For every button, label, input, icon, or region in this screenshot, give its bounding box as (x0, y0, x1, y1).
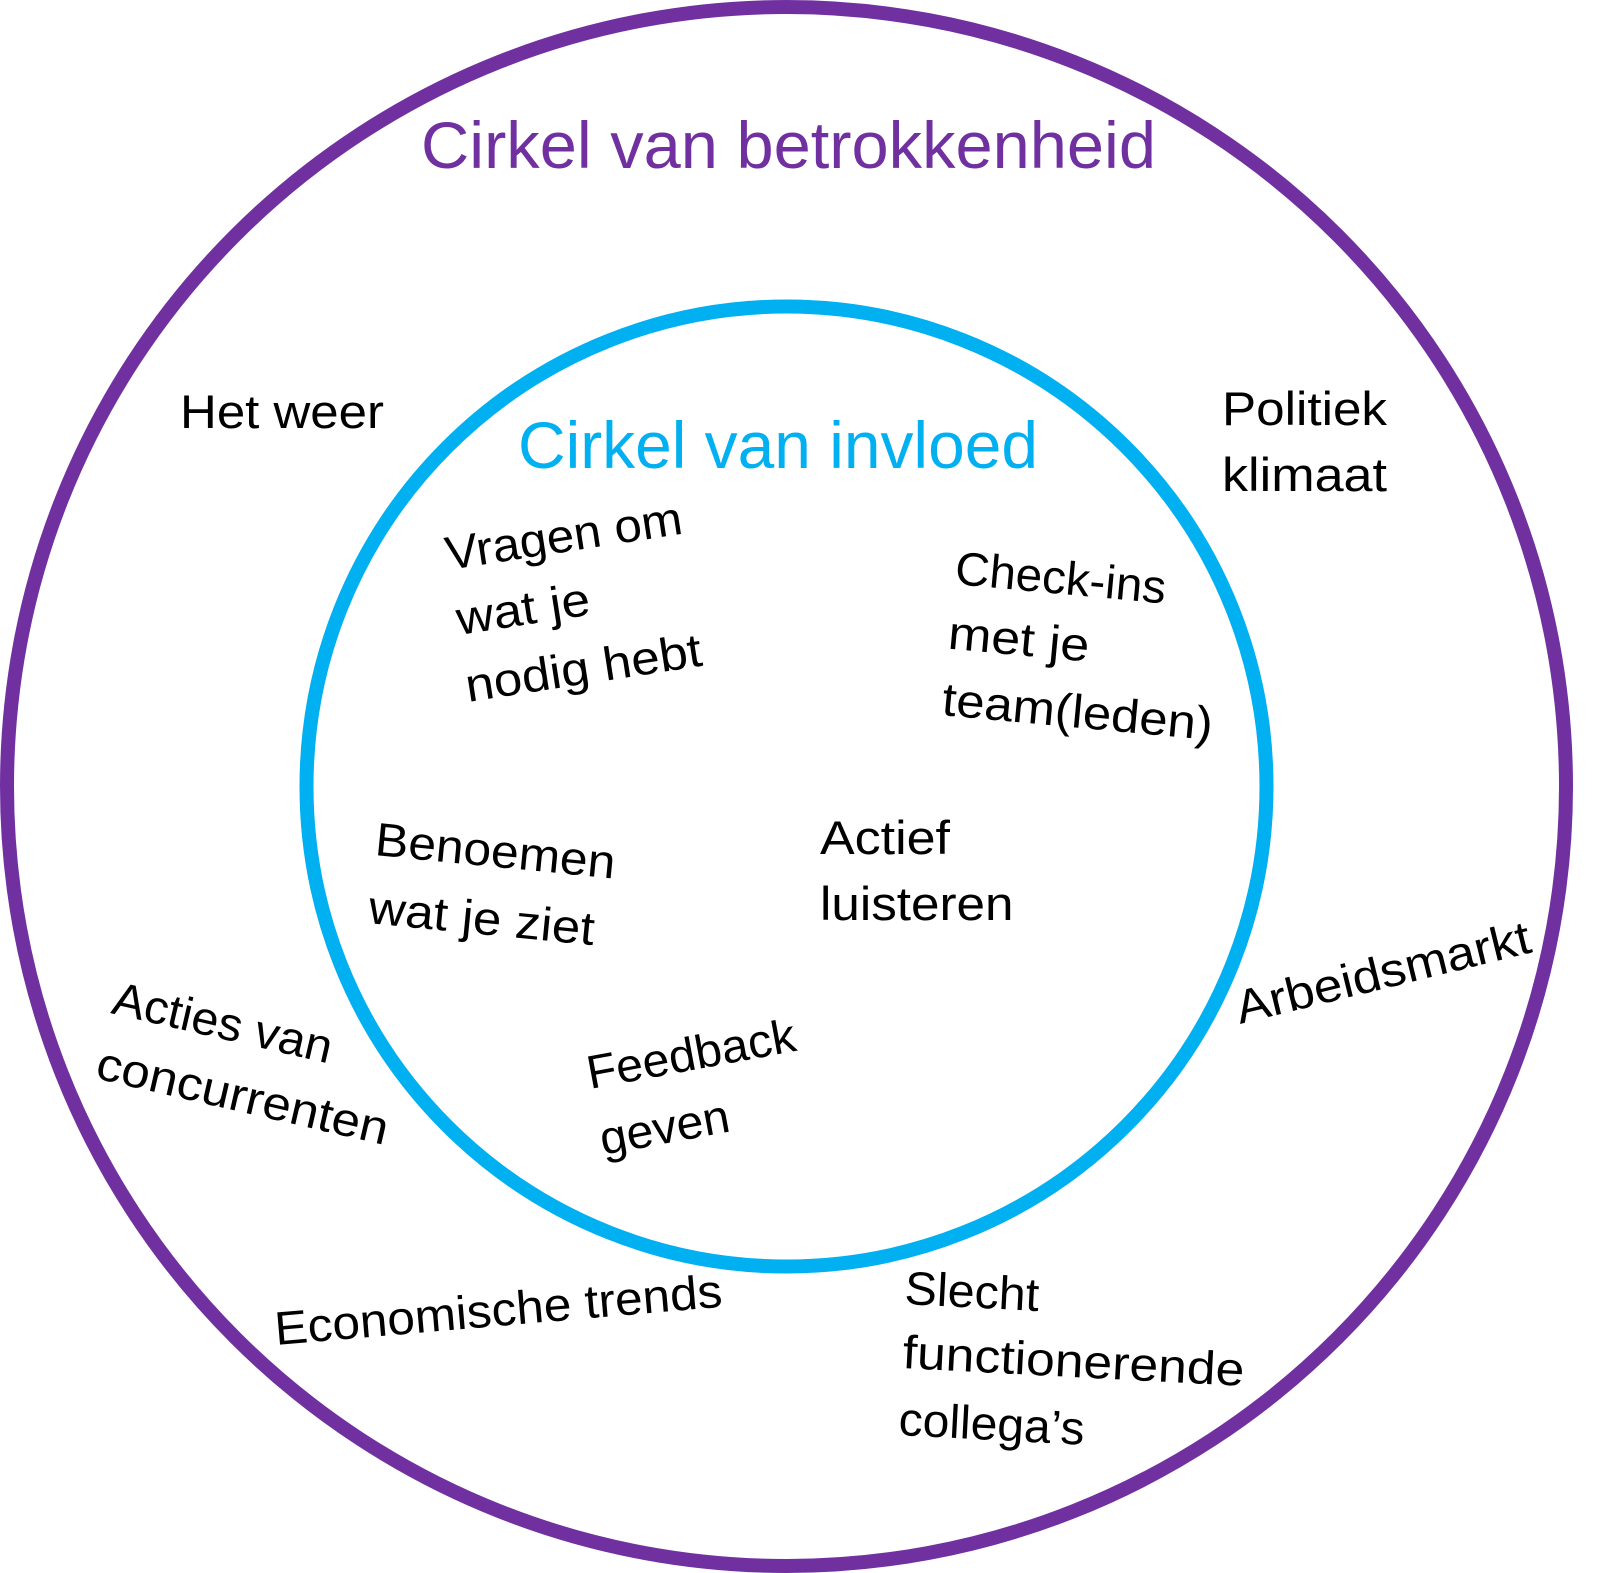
label: Acties van concurrenten (92, 971, 394, 1155)
label: Check-ins met je team(leden): met je (946, 606, 1092, 672)
label: Benoemen wat je ziet (365, 812, 618, 955)
label: Arbeidsmarkt: Arbeidsmarkt (1230, 910, 1536, 1034)
label: Feedback geven: geven (595, 1089, 734, 1165)
label: Check-ins met je team(leden): team(leden) (940, 672, 1215, 750)
label: Politiek klimaat: Politiek (1222, 382, 1388, 435)
heading: Cirkel van betrokkenheid: Cirkel van betrokkenheid (421, 108, 1156, 182)
label: Slecht functionerende collega's: functionerende (901, 1325, 1246, 1396)
label: Benoemen wat je ziet: wat je ziet (365, 880, 597, 955)
label: Vragen om wat je nodig hebt: Vragen om (441, 491, 686, 580)
label: Feedback geven: Feedback (582, 1008, 800, 1099)
label: Slecht functionerende collega's: collega’s (897, 1392, 1086, 1455)
label: Check-ins met je team(leden) (940, 541, 1215, 750)
label: Actief luisteren (820, 811, 1014, 930)
label: Actief luisteren: Actief (820, 811, 951, 864)
label: Politiek klimaat (1222, 382, 1388, 501)
label: Vragen om wat je nodig hebt (441, 491, 705, 712)
label: Feedback geven (582, 1008, 800, 1165)
inner circle: invloed (306, 306, 1266, 1266)
label: Slecht functionerende collega's: Slecht (903, 1261, 1041, 1321)
label: Benoemen wat je ziet: Benoemen (373, 812, 618, 888)
heading: Cirkel van invloed: Cirkel van invloed (518, 408, 1038, 482)
label: Politiek klimaat: klimaat (1222, 448, 1387, 501)
label: Vragen om wat je nodig hebt: wat je (451, 572, 593, 645)
label: Check-ins met je team(leden): Check-ins (953, 541, 1169, 613)
label: Actief luisteren: luisteren (820, 877, 1014, 930)
label: Acties van concurrenten: concurrenten (92, 1036, 394, 1155)
label: Acties van concurrenten: Acties van (108, 971, 338, 1073)
label: Het weer: Het weer (180, 385, 384, 438)
label: Vragen om wat je nodig hebt: nodig hebt (461, 623, 705, 712)
label: Slecht functionerende collega's (897, 1261, 1246, 1455)
label: Economische trends: Economische trends (272, 1264, 724, 1355)
